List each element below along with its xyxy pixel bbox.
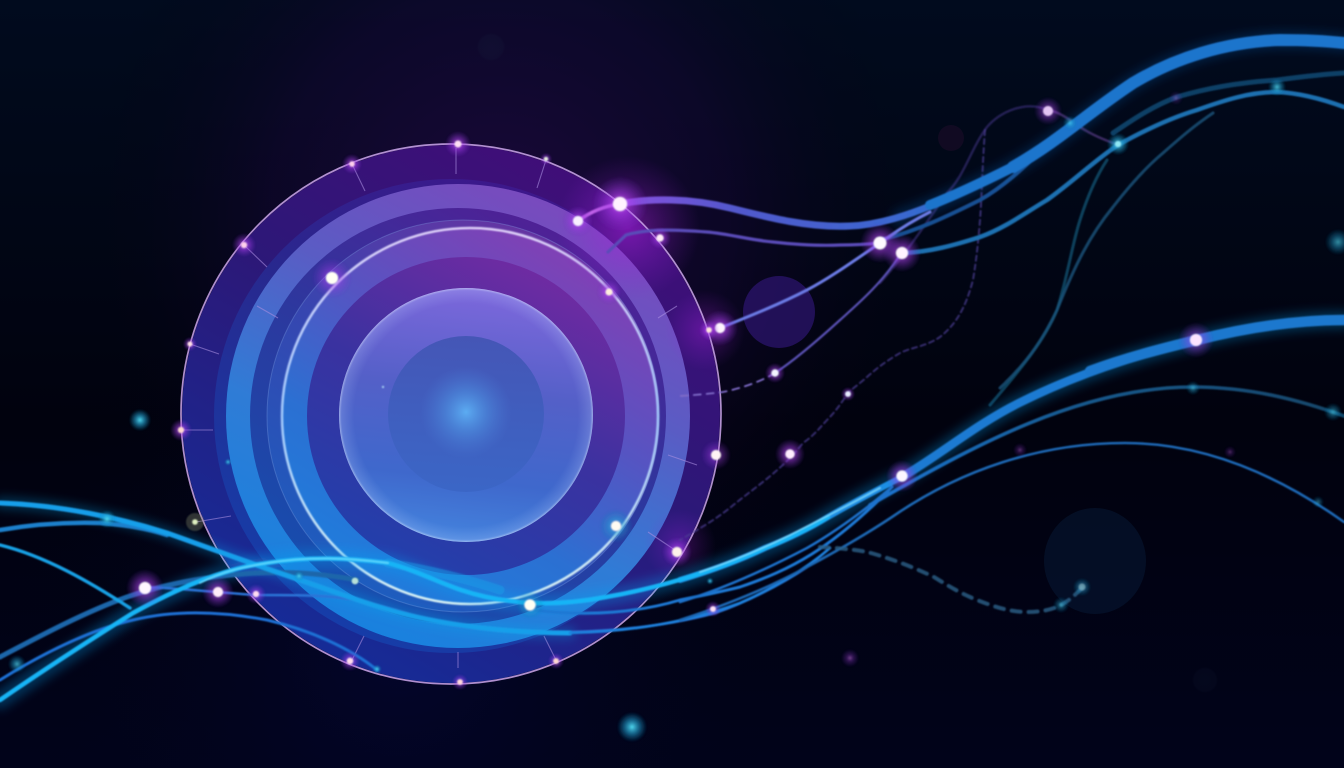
ring tick marks xyxy=(181,148,697,668)
faint background orbs xyxy=(477,33,1218,693)
upper flowing lines xyxy=(578,40,1344,540)
concentric circle graphic xyxy=(181,144,745,684)
lower flowing lines xyxy=(0,320,1344,700)
magenta glow on the disc xyxy=(556,156,745,581)
central sphere xyxy=(339,288,593,542)
bright inner arc xyxy=(282,228,658,604)
thin outer ring xyxy=(181,144,721,684)
